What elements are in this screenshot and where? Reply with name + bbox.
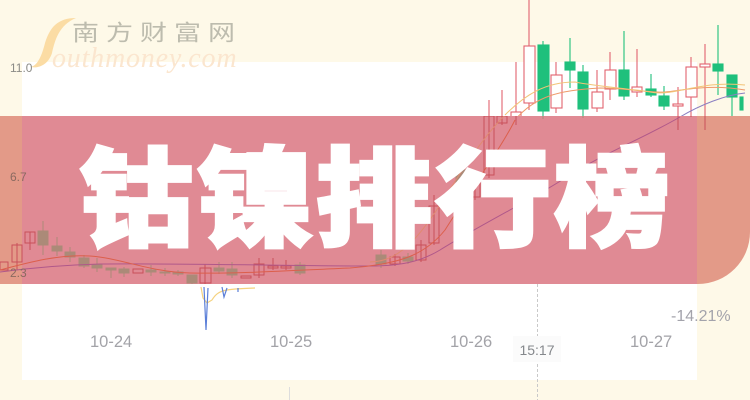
logo: southmoney: [32, 15, 242, 74]
volume spike: [201, 287, 255, 330]
time label: 15:17: [519, 342, 555, 358]
heading: 钴镍排行榜: [78, 140, 673, 261]
logo swoosh S: [32, 18, 76, 68]
logo Chinese name: 南方财富网: [72, 15, 242, 47]
axis label 2.3: 2.3: [10, 266, 27, 280]
axis label 6.7: 6.7: [10, 170, 27, 184]
date label 10-24: 10-24: [90, 333, 132, 351]
title band: [0, 116, 750, 284]
crosshair line: [536, 284, 538, 400]
axis label 11.0: 11.0: [10, 61, 32, 75]
date label 10-27: 10-27: [630, 333, 672, 351]
logo domain: outhmoney.com: [52, 43, 237, 74]
small tick: [288, 387, 290, 400]
date label 10-25: 10-25: [270, 333, 312, 351]
date label 10-26: 10-26: [450, 333, 492, 351]
white chart panel: [22, 62, 697, 380]
chart seen through band: [0, 116, 706, 284]
time label: [513, 336, 561, 362]
percent label: -14.21%: [671, 308, 731, 325]
